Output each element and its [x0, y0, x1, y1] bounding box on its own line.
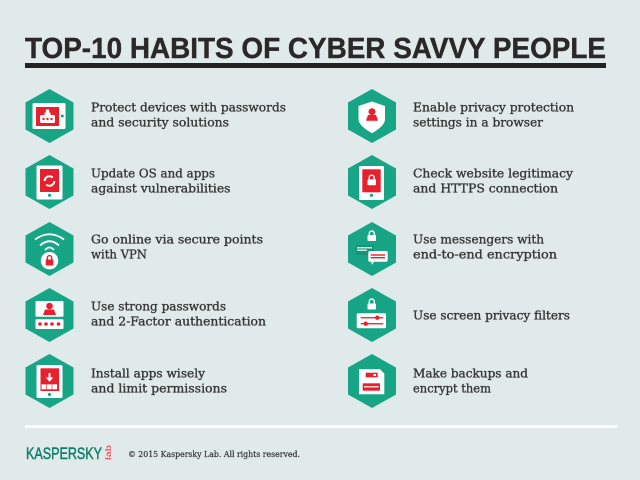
copyright: © 2015 Kaspersky Lab. All rights reserved.: [128, 450, 300, 459]
icon: tablet with password: [26, 89, 74, 143]
icon: tablet with download: [26, 354, 74, 408]
icon: tablet with lock: [348, 155, 396, 209]
text: habit 5: Install apps wisely: [91, 367, 205, 381]
text: habit 3: Go online via secure points: [91, 233, 263, 247]
icon: privacy filter sliders with lock: [348, 288, 396, 342]
icon: tablet with update arrows: [26, 155, 74, 209]
text: habit 4: Use strong passwords: [91, 300, 226, 314]
text: habit 4: [91, 300, 266, 329]
text: habit 8: [413, 233, 557, 262]
text: habit 7: Check website legitimacy: [413, 167, 573, 181]
footer divider: [25, 425, 617, 428]
icon: wifi with lock: [26, 222, 74, 276]
text: habit 5: [91, 367, 227, 396]
text: habit 2: against vulnerabilities: [91, 182, 230, 196]
text: habit 1: Protect devices with passwords: [91, 101, 286, 115]
text: habit 6: settings in a browser: [413, 116, 543, 130]
text: habit 1: and security solutions: [91, 116, 229, 130]
text: habit 1: [91, 101, 286, 130]
text: habit 3: [91, 233, 263, 262]
title underline: [25, 63, 606, 68]
icon: messages with lock: [348, 222, 396, 276]
text: habit 9: Use screen privacy filters: [413, 309, 570, 323]
text: habit 7: and HTTPS connection: [413, 182, 558, 196]
text: habit 8: end-to-end encryption: [413, 248, 557, 262]
text: habit 10: Make backups and: [413, 367, 528, 381]
title: TOP-10 HABITS OF CYBER SAVVY PEOPLE: [25, 33, 606, 65]
text: habit 6: Enable privacy protection: [413, 101, 574, 115]
logo: Kaspersky Lab: KASPERSKY: [26, 444, 102, 463]
text: habit 7: [413, 167, 573, 196]
text: habit 3: with VPN: [91, 248, 147, 262]
text: habit 2: [91, 167, 230, 196]
icon: user card and password: [26, 288, 74, 342]
text: habit 6: [413, 101, 574, 130]
logo: Kaspersky Lab: lab: [103, 445, 113, 460]
text: habit 2: Update OS and apps: [91, 167, 215, 181]
icon: floppy disk backup: [348, 354, 396, 408]
icon: shield with user: [348, 89, 396, 143]
text: habit 8: Use messengers with: [413, 233, 544, 247]
text: habit 10: [413, 367, 528, 396]
text: habit 5: and limit permissions: [91, 382, 227, 396]
text: habit 4: and 2-Factor authentication: [91, 315, 266, 329]
text: habit 10: encrypt them: [413, 382, 492, 396]
